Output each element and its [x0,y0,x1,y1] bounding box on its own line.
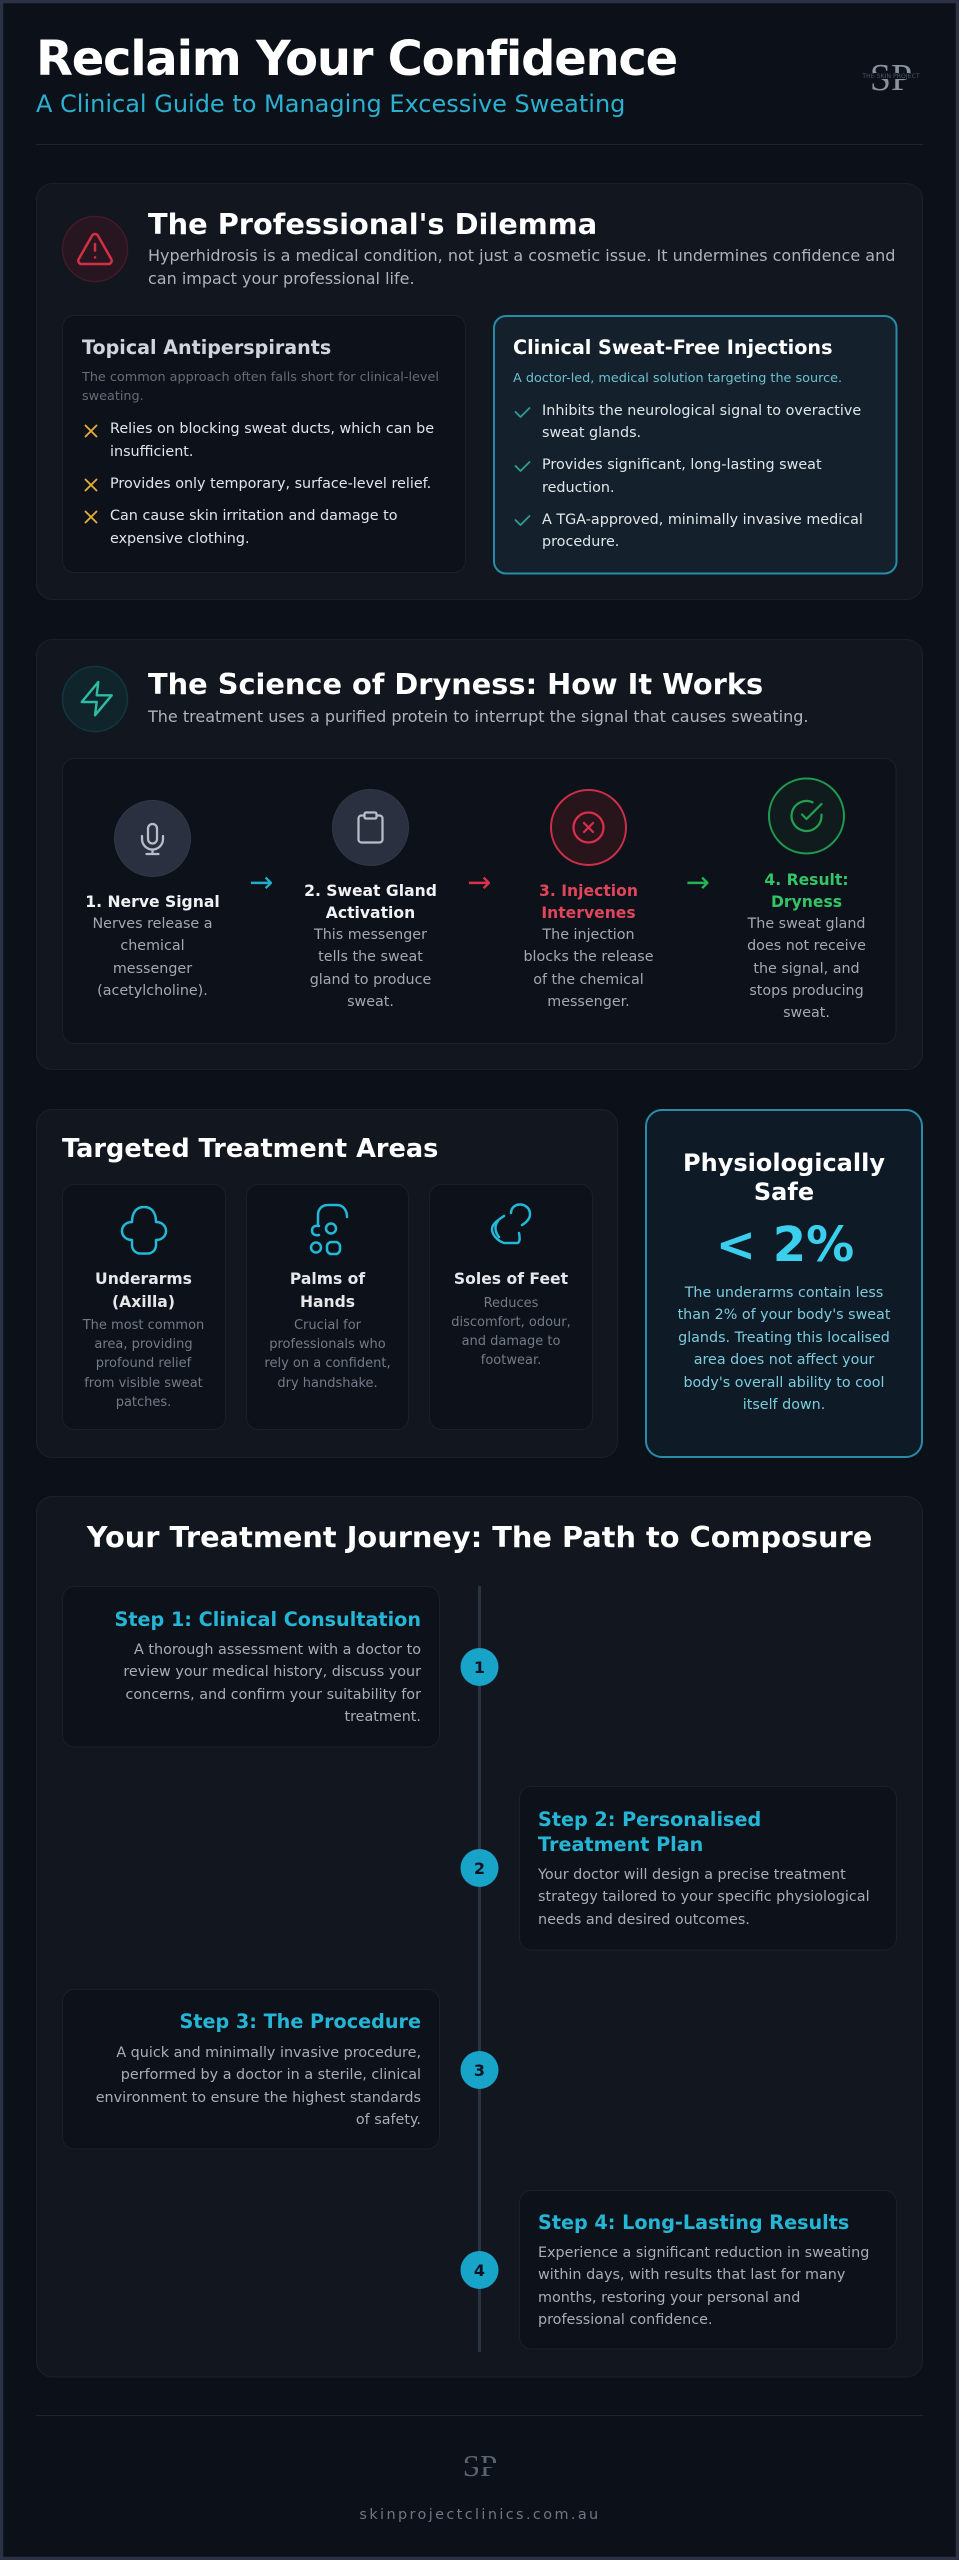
step 2: sweat gland activation: gland to produce [310,972,431,988]
panel: clinical sweat-free injections [494,316,896,574]
step 3 marker: 3 [474,2061,485,2080]
card: soles of feet: Soles of Feet [454,1270,569,1288]
step 3: injection intervenes: blocks the release [523,949,654,965]
card: underarms: patches. [116,1395,171,1410]
step 4 card: Experience a significant reduction in sweating [538,2245,869,2261]
list: Relies on blocking sweat ducts, which can be [110,421,434,437]
footer [359,2448,601,2523]
card: soles of feet: discomfort, odour, [451,1315,571,1330]
step 3: injection intervenes: messenger. [547,994,630,1010]
step 1 card: concerns, and confirm your suitability for [125,1687,421,1703]
header [36,31,920,118]
icon: underarm [122,1207,166,1254]
step 2 marker [460,1849,498,1887]
step 4: result dryness: does not receive [747,938,866,954]
step 3: injection intervenes [523,790,654,1010]
step 1 card: A thorough assessment with a doctor to [134,1642,421,1658]
callout: physiologically safe: than 2% of your body's sweat [678,1307,891,1323]
step 2: sweat gland activation: sweat. [347,994,394,1010]
step 4: result dryness: stops producing [749,983,864,999]
card: underarms: (Axilla) [112,1293,175,1311]
step 2 marker: 2 [474,1859,485,1878]
list: insufficient. [110,444,193,460]
step 1: nerve signal: 1. Nerve Signal [85,893,220,911]
website: skinprojectclinics.com.au [359,2507,601,2523]
step 2: sweat gland activation: This messenger [313,927,427,943]
step 4 marker: 4 [474,2261,485,2280]
subtitle: A Clinical Guide to Managing Excessive Sweating [36,90,625,118]
step 2: sweat gland activation [304,790,437,1010]
statistic: < 2% [716,1217,854,1273]
panel: treatment journey [36,1496,922,2377]
list: sweat glands. [542,425,641,441]
step 4 marker [460,2251,498,2289]
step 4: result dryness: The sweat gland [747,916,865,932]
list: Inhibits the neurological signal to overactive [542,403,861,419]
step 1 marker: 1 [474,1658,485,1677]
heading: The Professional's Dilemma [148,207,597,241]
card: underarms: The most common [82,1318,204,1333]
panel: topical antiperspirants: sweating. [82,389,144,404]
logo: SP: SP [463,2448,497,2483]
card: palms of hands: dry handshake. [277,1376,378,1391]
card: palms of hands: Crucial for [294,1318,362,1333]
step 3 card: performed by a doctor in a sterile, clinical [121,2067,421,2083]
list: Can cause skin irritation and damage to [110,508,398,524]
card: palms of hands [246,1184,408,1430]
card: underarms: Underarms [95,1270,192,1288]
list: procedure. [542,534,619,550]
process diagram [62,758,896,1044]
icon: lightning bolt [62,666,128,732]
intro text: Hyperhidrosis is a medical condition, not just a cosmetic issue. It undermines confidence and [148,246,895,265]
step 1 card [62,1586,440,1747]
card: underarms: from visible sweat [84,1376,203,1391]
panel: clinical sweat-free injections: A doctor-led, medical solution targeting the source. [513,371,842,386]
step 3 card [62,1990,440,2149]
list: A TGA-approved, minimally invasive medical [542,512,863,528]
card: underarms [62,1184,226,1430]
step 3 card: environment to ensure the highest standards [96,2090,421,2106]
step 3: injection intervenes: of the chemical [533,972,644,988]
callout: physiologically safe [646,1110,922,1457]
callout: physiologically safe: The underarms contain less [684,1285,883,1301]
logo: SP: SP [870,57,912,99]
arrow: → [467,865,492,899]
step 3: injection intervenes: 3. Injection [539,882,638,900]
card: soles of feet: footwear. [481,1353,541,1368]
step 2: sweat gland activation: tells the sweat [318,949,423,965]
step 1: nerve signal: chemical [120,938,185,954]
callout: physiologically safe: glands. Treating this localised [678,1330,890,1346]
step 2: sweat gland activation: Activation [326,904,415,922]
panel: topical antiperspirants: Topical Antiperspirants [82,336,331,359]
heading: Your Treatment Journey: The Path to Composure [86,1520,872,1554]
callout: physiologically safe: body's overall ability to cool [683,1375,885,1391]
icon: foot [492,1204,530,1243]
step 3: injection intervenes: The injection [541,927,635,943]
step 4 card: Step 4: Long-Lasting Results [538,2211,849,2234]
step 4: result dryness [747,778,866,1021]
step 3 marker [460,2051,498,2089]
step 1: nerve signal: Nerves release a [92,916,213,932]
icon: warning triangle [62,216,128,282]
step 1: nerve signal: messenger [113,961,192,977]
panel: clinical sweat-free injections: Clinical Sweat-Free Injections [513,336,833,359]
step 1: nerve signal: (acetylcholine). [97,983,208,999]
list: reduction. [542,480,615,496]
arrow: → [686,865,710,899]
arrow: → [249,865,274,899]
card: soles of feet [430,1184,592,1430]
heading: Targeted Treatment Areas [62,1134,438,1164]
heading: The Science of Dryness: How It Works [148,667,763,701]
step 1 card: review your medical history, discuss your [123,1664,421,1680]
card: palms of hands: rely on a confident, [264,1356,391,1371]
step 3 card: A quick and minimally invasive procedure, [116,2045,421,2061]
list: expensive clothing. [110,531,250,547]
title: Reclaim Your Confidence [36,31,677,87]
step 1: nerve signal [85,800,220,999]
step 4 card: within days, with results that last for many [538,2267,846,2283]
card: soles of feet: and damage to [462,1334,560,1349]
card: palms of hands: Palms of [290,1270,365,1288]
callout: physiologically safe: Safe [754,1178,814,1206]
panel: targeted treatment areas [36,1110,618,1458]
card: underarms: profound relief [96,1356,192,1371]
callout: physiologically safe: itself down. [743,1397,825,1413]
logo: SP: THE SKIN PROJECT [861,73,920,80]
step 2: sweat gland activation: 2. Sweat Gland [304,882,437,900]
panel: topical antiperspirants [62,316,466,572]
card: soles of feet: Reduces [484,1296,539,1311]
icon: cross [86,426,96,522]
step 2 card [520,1786,896,1950]
step 4: result dryness: the signal, and [753,961,860,977]
panel: the science of dryness [36,640,922,1070]
step 2 card: strategy tailored to your specific physiological [538,1889,870,1905]
panel: the professional's dilemma [36,184,922,600]
step 4 card [520,2190,896,2349]
step 4: result dryness: 4. Result: [764,871,849,889]
step 3: injection intervenes: Intervenes [541,904,636,922]
panel: topical antiperspirants: The common approach often falls short for clinical-level [81,370,439,385]
timeline line [478,1586,481,2352]
step 3 card: Step 3: The Procedure [179,2010,421,2033]
icon: palm [311,1205,347,1254]
step 4: result dryness: Dryness [771,893,842,911]
card: underarms: area, providing [94,1337,193,1352]
icon: checks [516,408,530,525]
card: palms of hands: Hands [300,1293,355,1311]
list: Provides significant, long-lasting sweat [542,457,822,473]
intro text: The treatment uses a purified protein to interrupt the signal that causes sweating. [147,707,809,726]
step 4 card: months, restoring your personal and [538,2290,800,2306]
step 1 marker [460,1648,498,1686]
step 2 card: Step 2: Personalised [538,1808,761,1831]
step 1 card: treatment. [344,1709,421,1725]
step 2 card: Treatment Plan [538,1833,703,1856]
step 2 card: Your doctor will design a precise treatment [537,1867,846,1883]
step 4: result dryness: sweat. [783,1005,830,1021]
intro text: can impact your professional life. [148,269,415,288]
callout: physiologically safe: Physiologically [683,1149,885,1177]
step 2 card: needs and desired outcomes. [538,1912,750,1928]
step 3 card: of safety. [356,2112,421,2128]
callout: physiologically safe: area does not affect your [694,1352,874,1368]
list: Provides only temporary, surface-level relief. [110,476,431,492]
card: palms of hands: professionals who [269,1337,386,1352]
step 4 card: professional confidence. [538,2312,713,2328]
step 1 card: Step 1: Clinical Consultation [115,1608,421,1631]
